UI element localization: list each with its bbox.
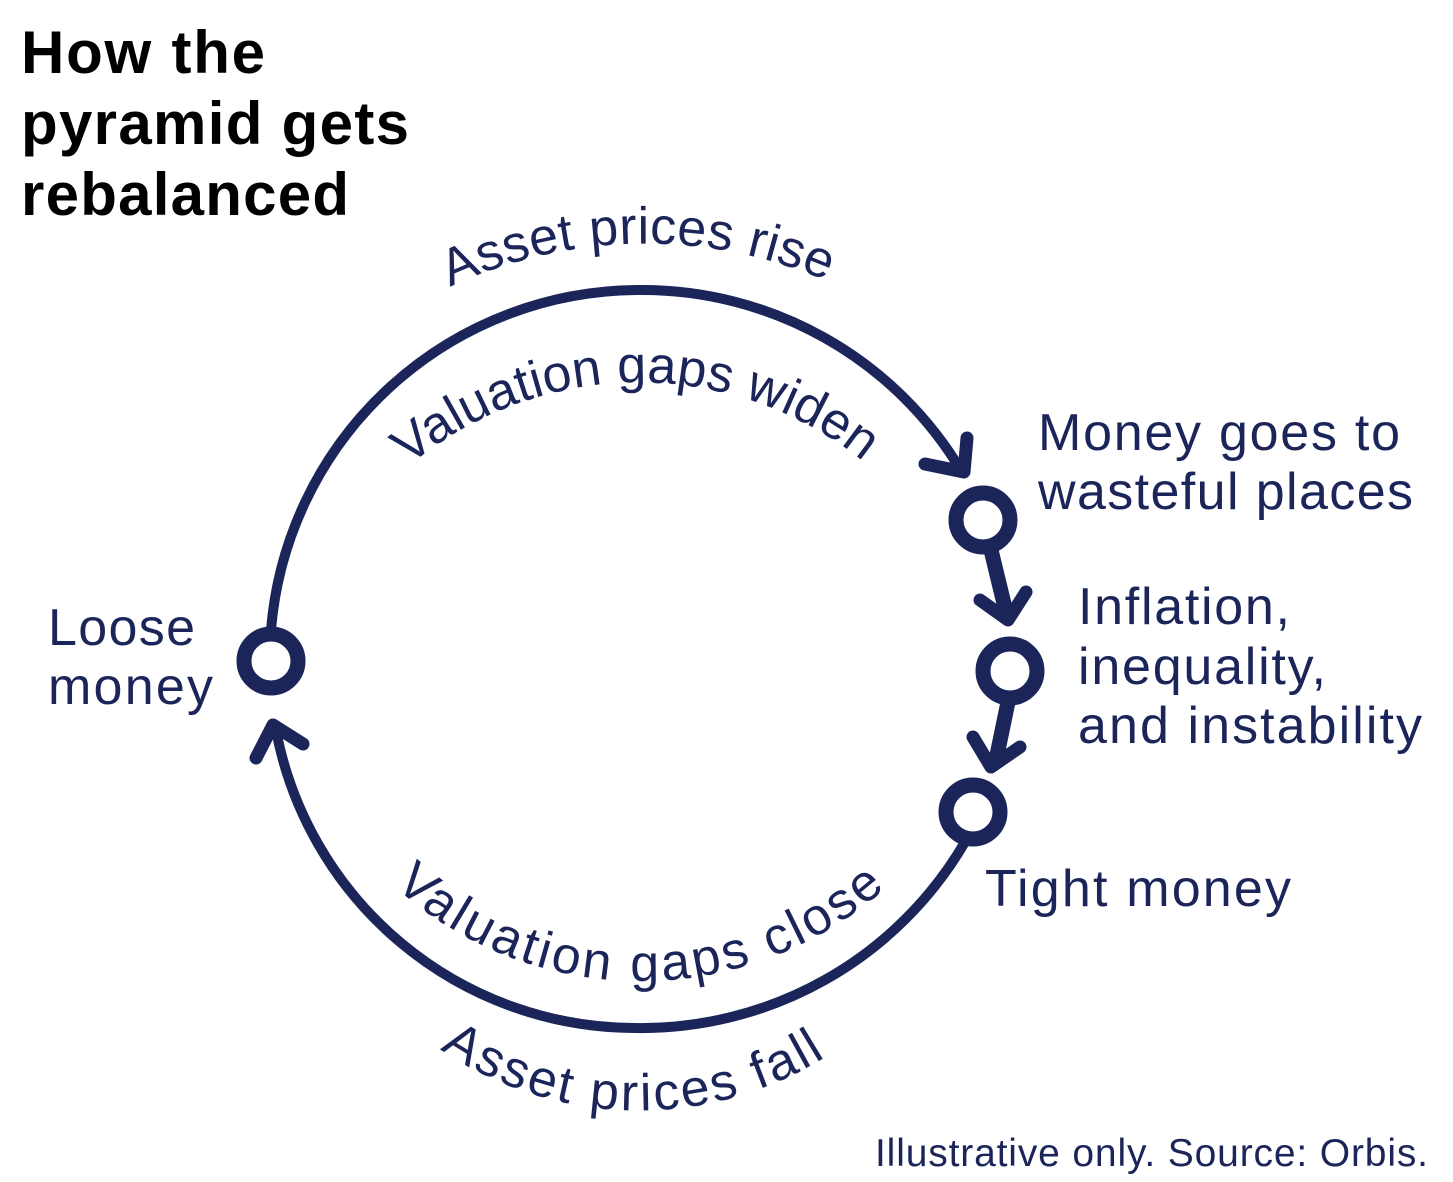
node: loose money [244,634,298,688]
label: loose money: Loose [48,599,195,657]
node: inflation [983,644,1037,698]
title: pyramid gets [21,90,409,157]
arrow: money to inflation [980,550,1026,620]
label: money goes to wasteful places: wasteful places [1037,463,1413,521]
label: inflation, inequality, and instability: inequality, [1078,638,1326,696]
title [21,19,409,228]
title: How the [21,19,265,86]
label: money goes to wasteful places: Money goes to [1038,404,1400,462]
title: rebalanced [21,161,349,228]
arrow: inflation to tight money [973,702,1020,767]
label: valuation gaps close: Valuation gaps close [405,858,880,992]
label: asset prices rise: Asset prices rise [449,206,832,287]
label: loose money [48,599,213,716]
node: tight money [946,785,1000,839]
node: wasteful places [956,493,1010,547]
label: inflation, inequality, and instability [1078,578,1422,755]
label: valuation gaps widen: Valuation gaps widen [387,354,874,460]
label: inflation, inequality, and instability: Inflation, [1078,578,1290,636]
upper cycle arrow [271,290,967,630]
label: inflation, inequality, and instability: and instability [1078,697,1422,755]
label: asset prices fall: Asset prices fall [440,1026,823,1119]
label: loose money: money [48,658,213,716]
lower cycle arrow [256,725,965,1028]
label: tight money: Tight money [985,860,1291,918]
label: money goes to wasteful places [1037,404,1413,521]
source note: Illustrative only. Source: Orbis. [875,1132,1428,1175]
